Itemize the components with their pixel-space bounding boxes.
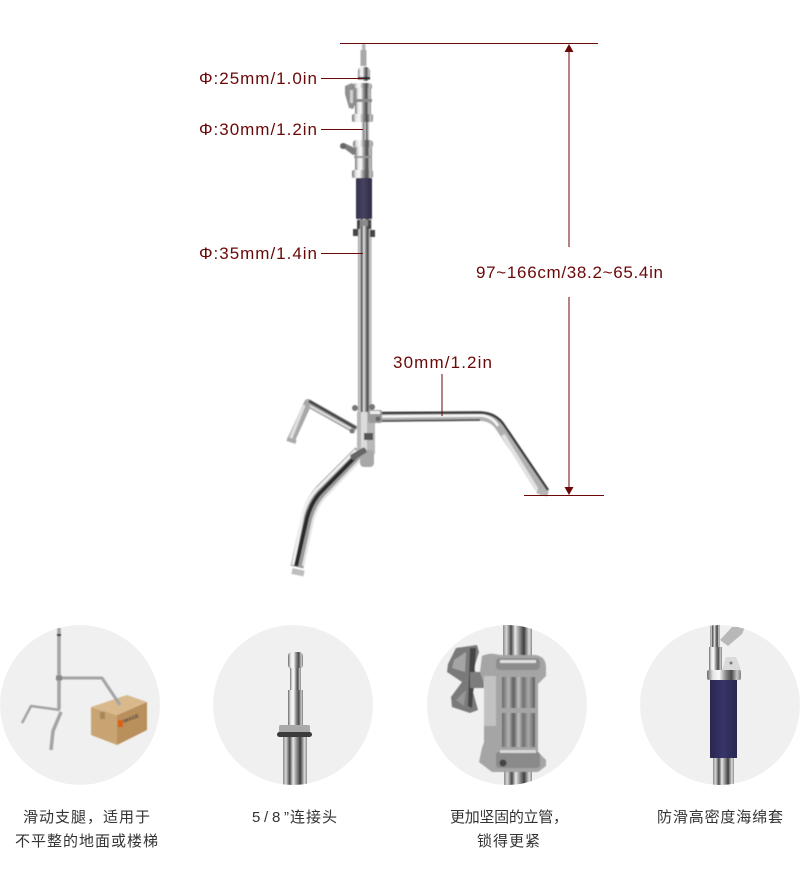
caption: 5/8”	[252, 809, 289, 826]
label: leg tube diameter	[393, 353, 492, 416]
caption: 连接头	[290, 809, 337, 826]
dimension: height	[340, 43, 663, 496]
label: 30mm diameter: Φ:30mm/1.2in	[199, 120, 317, 139]
top spigot	[360, 44, 366, 66]
right leg	[380, 412, 548, 494]
caption	[450, 809, 568, 850]
lower riser section	[340, 140, 373, 178]
caption: 不平整的地面或楼梯	[15, 833, 158, 850]
clip plate with rivet	[722, 657, 741, 670]
thin riser	[362, 122, 369, 141]
box	[91, 695, 147, 745]
tubes	[503, 625, 532, 785]
feature: sliding leg	[0, 625, 160, 850]
main product: C-stand	[287, 44, 548, 574]
feature: 5/8 connector	[213, 625, 373, 826]
caption	[15, 809, 158, 850]
clamp	[353, 220, 375, 237]
caption: 更加坚固的立管，	[450, 809, 568, 826]
caption: 防滑高密度海绵套	[657, 809, 783, 826]
top collar	[358, 67, 370, 81]
label: 25mm diameter: Φ:25mm/1.0in	[199, 69, 317, 88]
black ring	[358, 77, 370, 80]
label: 35mm diameter: Φ:35mm/1.4in	[199, 244, 317, 263]
circle photo: spigot	[213, 625, 373, 785]
circle photo: stand on box	[0, 625, 160, 785]
label: leg tube diameter: 30mm/1.2in	[393, 353, 492, 372]
clamp body	[479, 654, 546, 772]
upper riser section	[345, 83, 373, 122]
front leg	[292, 450, 363, 574]
circle photo: clamp	[427, 625, 587, 785]
wing knob	[447, 645, 484, 713]
base hub	[350, 404, 382, 467]
mini stand	[22, 628, 120, 750]
dimension: height: 97~166cm/38.2~65.4in	[476, 263, 663, 282]
rear left leg	[287, 401, 356, 442]
feature: foam grip	[640, 625, 800, 826]
feature: sturdier riser	[427, 625, 587, 850]
main tube	[358, 218, 372, 413]
box: IMAGE	[123, 713, 141, 725]
caption: 锁得更紧	[477, 833, 540, 850]
foam grip	[356, 178, 372, 219]
circle photo: grip	[640, 625, 800, 785]
caption: 滑动支腿，适用于	[23, 809, 150, 826]
